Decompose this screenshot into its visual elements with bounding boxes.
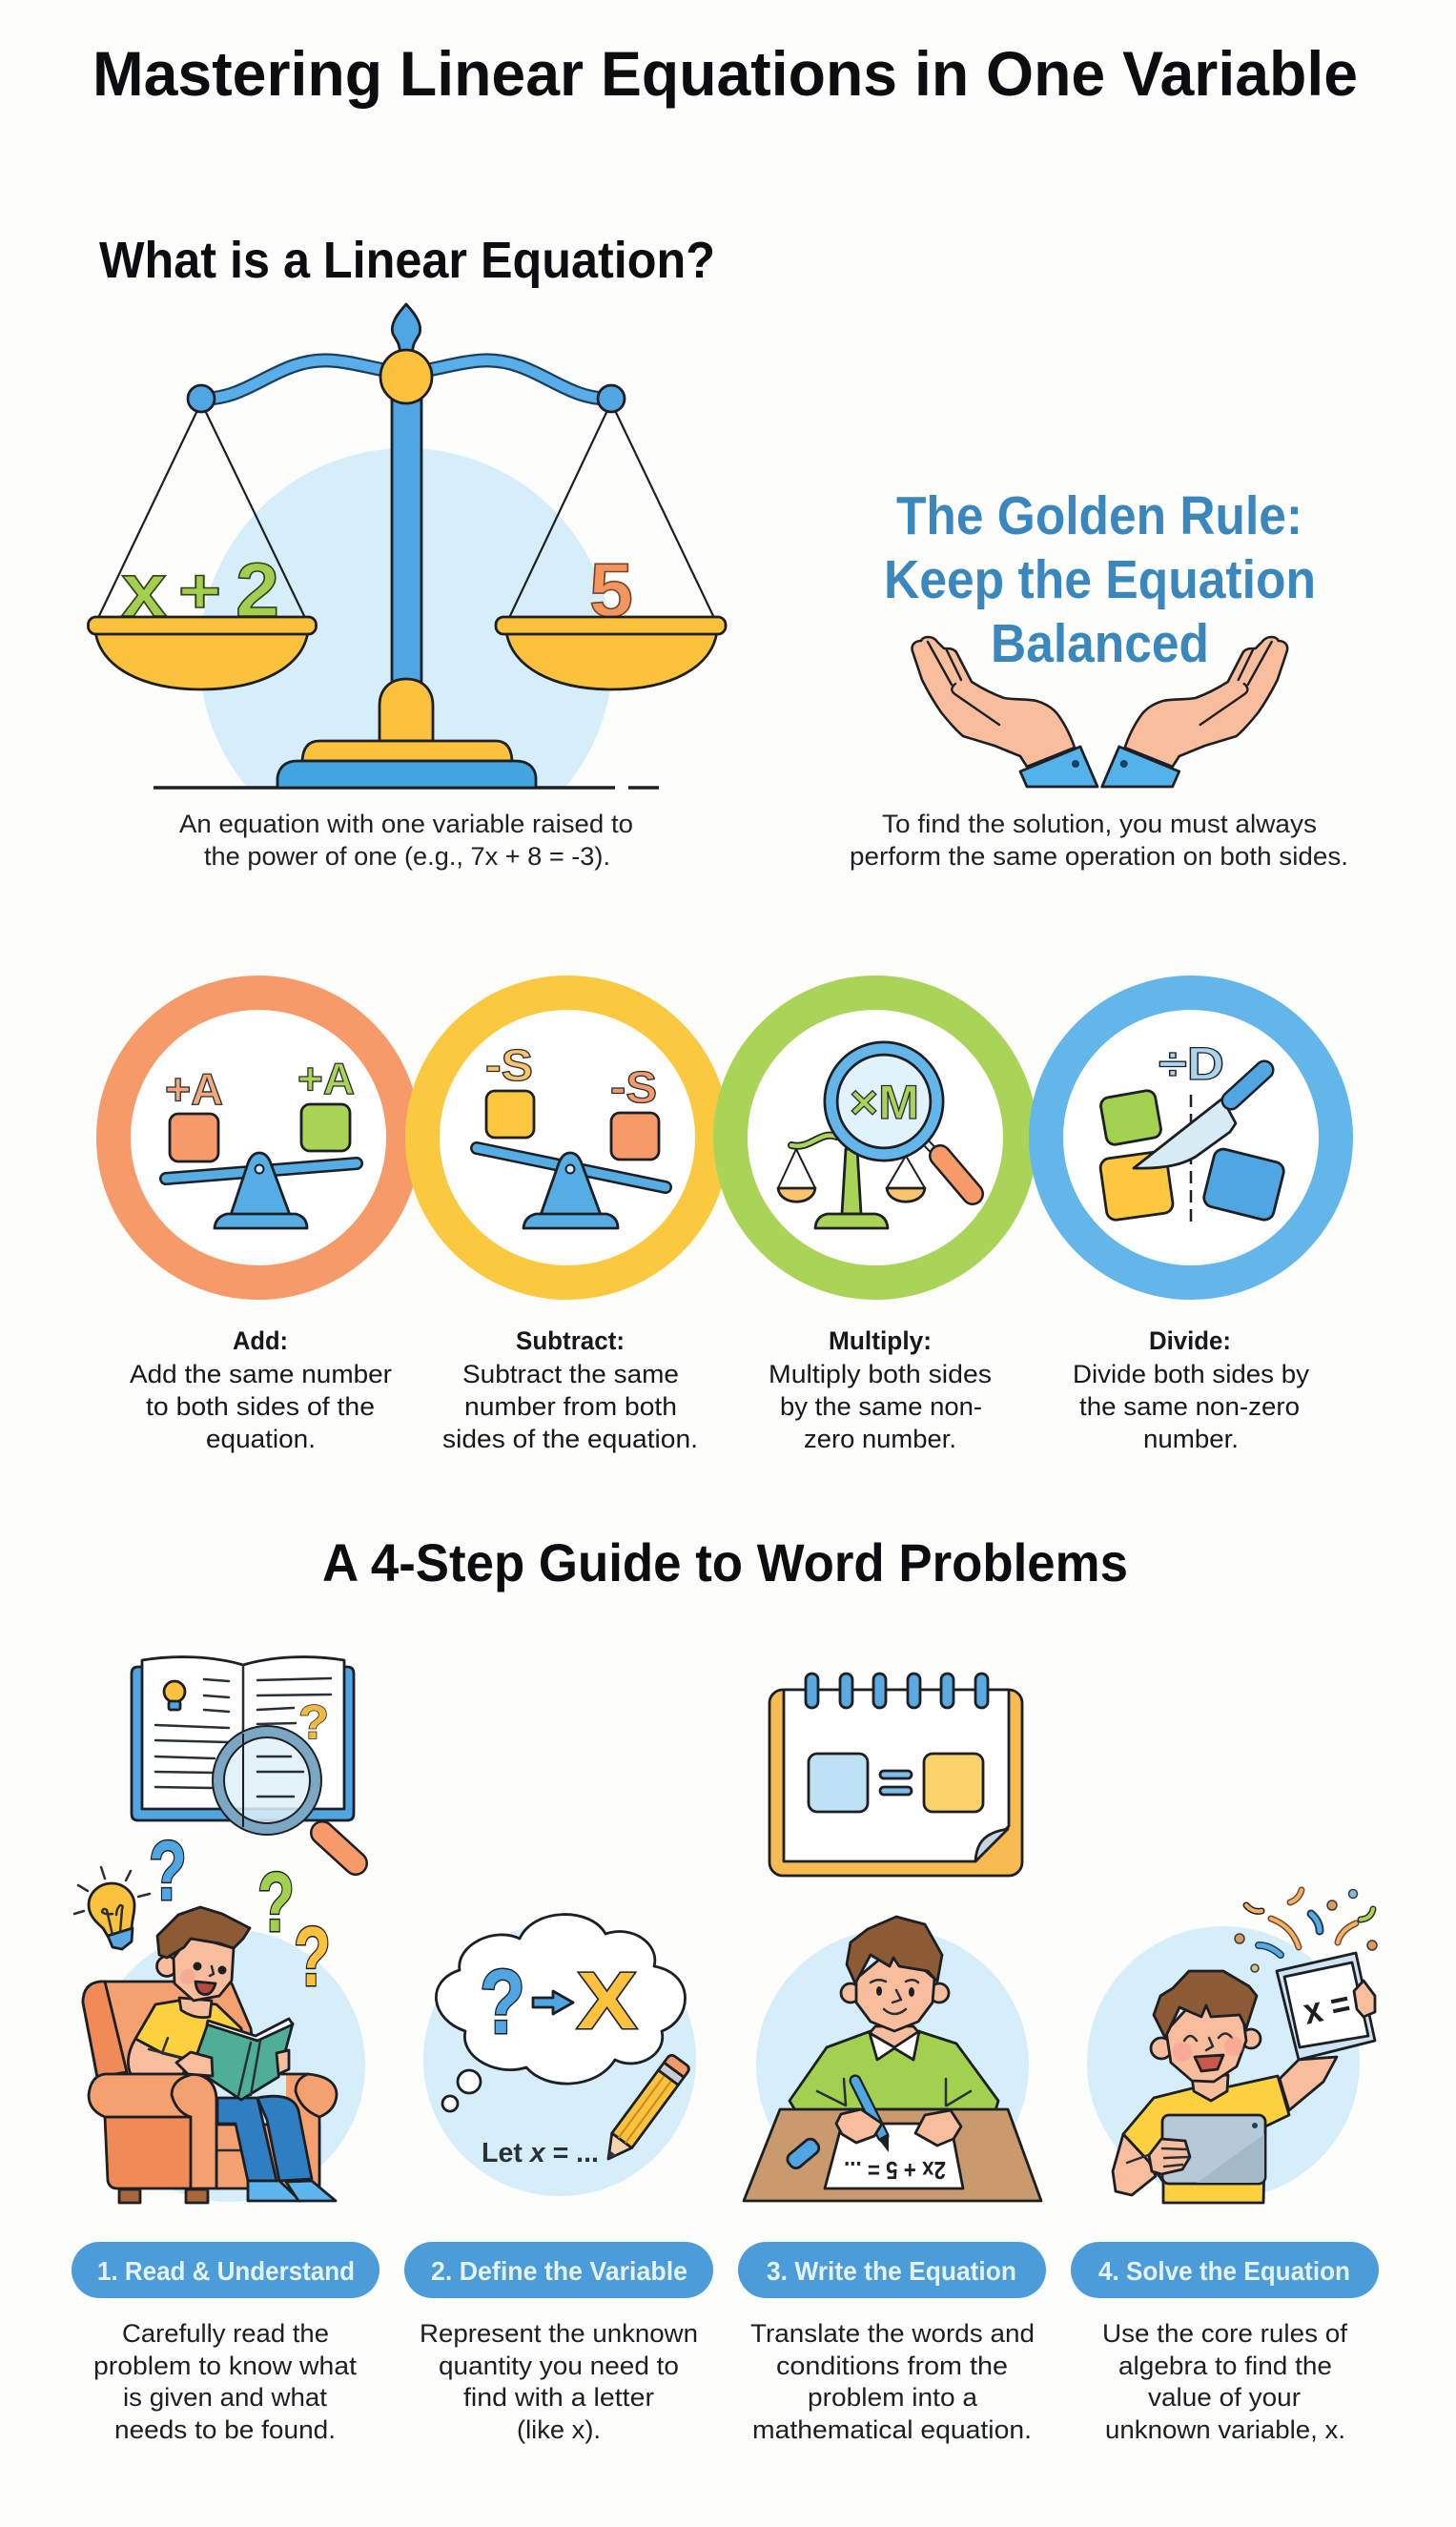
pen: [855, 2081, 883, 2136]
icon: light bulb and question marks: [74, 1823, 331, 2003]
text: divide: Divide:: [1149, 1326, 1231, 1355]
step 2 description: [420, 2319, 698, 2444]
text: multiply: zero number.: [804, 1425, 956, 1453]
raised arm: [1280, 2057, 1337, 2110]
step 3 label pill: 3. Write the Equation: [767, 2256, 1016, 2286]
shirt: [135, 2001, 250, 2079]
caption: golden rule: To find the solution, you must always: [882, 810, 1317, 838]
book: [197, 2024, 293, 2100]
seat behind legs: [216, 2125, 319, 2188]
head: [1151, 2038, 1172, 2059]
icon: light bulb and question marks: ?: [149, 1823, 187, 1918]
illustration: balance scale: [87, 303, 727, 790]
icon: open book with magnifier: [132, 1657, 356, 1863]
legs: [217, 2098, 277, 2181]
illustration: boy celebrating solution: [1087, 1890, 1377, 2203]
icon: blocks and knife: [1099, 1039, 1285, 1228]
caption: golden rule: [850, 810, 1348, 871]
raised tablet: [1277, 1953, 1375, 2060]
equation on left pan: 2: [236, 547, 279, 632]
step 4 description: Use the core rules of: [1102, 2319, 1348, 2348]
icon: notebook equation: [769, 1674, 1022, 1876]
step 4 label pill: 4. Solve the Equation: [1098, 2256, 1350, 2286]
desk: [744, 2109, 1041, 2201]
icon: seesaw subtract: -S: [610, 1062, 657, 1112]
question to x: ?: [480, 1951, 525, 2053]
step 1 description: is given and what: [123, 2383, 328, 2412]
step 1 description: problem to know what: [93, 2352, 358, 2380]
ring: green: [730, 993, 1020, 1283]
heading: golden rule: Keep the Equation: [884, 549, 1316, 610]
step 3 label pill: [738, 2242, 1046, 2298]
step 1 description: needs to be found.: [114, 2415, 336, 2444]
illustration: boy writing equation: [744, 1917, 1041, 2202]
panel: divide: [1046, 993, 1336, 1283]
number on right pan: 5: [589, 547, 633, 632]
text: multiply: [769, 1326, 992, 1453]
shirt: [1123, 2076, 1289, 2203]
chair back and wing: [83, 1982, 257, 2079]
step 3 description: Translate the words and: [750, 2319, 1035, 2348]
icon: seesaw add: +A: [165, 1064, 223, 1114]
icon: light bulb and question marks: ?: [294, 1909, 331, 2003]
step 4 description: [1102, 2319, 1348, 2444]
title: Mastering Linear Equations in One Variable: [92, 38, 1358, 109]
ring: yellow: [422, 993, 712, 1283]
illustration: boy reading in armchair: [83, 1907, 365, 2203]
head: [179, 1998, 212, 2018]
hands: [176, 2052, 213, 2076]
icon: open hands: [913, 637, 1287, 787]
icon: seesaw subtract: -S: [485, 1040, 533, 1090]
equation on left pan: x: [121, 547, 167, 632]
text: divide: [1073, 1326, 1310, 1453]
step 2 label pill: 2. Define the Variable: [431, 2256, 687, 2286]
paper: [825, 2124, 963, 2188]
step 2 label pill: [404, 2242, 713, 2298]
illustration: boy writing equation: 2x + 5 = ...: [844, 2156, 946, 2185]
step 4 description: unknown variable, x.: [1105, 2415, 1345, 2444]
icon: blocks and knife: ÷D: [1159, 1039, 1224, 1090]
pencil: [599, 2053, 690, 2167]
raised hand: [1354, 1981, 1375, 2017]
caption: golden rule: perform the same operation on both sides.: [850, 842, 1348, 871]
caption: definition: An equation with one variable raised to: [179, 810, 633, 838]
arm: [128, 2039, 189, 2074]
step 1 description: Carefully read the: [122, 2319, 329, 2348]
step 2 description: (like x).: [517, 2415, 601, 2444]
thought cloud: [436, 1915, 686, 2084]
heading: golden rule: The Golden Rule:: [896, 485, 1302, 546]
text: add: Add:: [233, 1326, 288, 1355]
text: subtract: number from both: [464, 1392, 677, 1421]
text: divide: the same non-zero: [1079, 1392, 1300, 1421]
icon: seesaw subtract: [477, 1040, 666, 1228]
icon: magnifier over small scale: [778, 1049, 973, 1228]
text: subtract: Subtract:: [516, 1326, 625, 1355]
neck: [1192, 2075, 1228, 2101]
equation on left pan: +: [178, 555, 221, 626]
hands: [836, 2109, 882, 2143]
let x text: Let x = ...: [482, 2138, 599, 2168]
text: add: equation.: [206, 1425, 316, 1453]
step 1 label pill: [72, 2242, 379, 2298]
raised tablet: x =: [1300, 1983, 1354, 2033]
shoes: [248, 2181, 300, 2201]
text: multiply: by the same non-: [780, 1392, 982, 1421]
heading: golden rule: [884, 485, 1316, 674]
icon: seesaw add: [165, 1054, 357, 1228]
caption: definition: [179, 810, 633, 871]
step 3 description: problem into a: [808, 2383, 978, 2412]
equation on left pan: [121, 547, 279, 632]
step 2 description: find with a letter: [463, 2383, 654, 2412]
text: subtract: sides of the equation.: [442, 1425, 698, 1453]
sweater: [790, 2031, 998, 2131]
step 4 label pill: [1071, 2242, 1379, 2298]
text: subtract: Subtract the same: [462, 1360, 679, 1388]
text: subtract: [442, 1326, 698, 1453]
left chair arm and front: [105, 2117, 191, 2188]
head: [841, 1983, 860, 2003]
eraser: [785, 2136, 822, 2170]
caption: definition: the power of one (e.g., 7x + 8 = -3).: [204, 842, 610, 871]
icon: light bulb and question marks: ?: [257, 1855, 295, 1949]
left arm and hand: [1113, 2134, 1156, 2195]
confetti: [1246, 1890, 1373, 1955]
text: multiply: Multiply:: [829, 1326, 932, 1355]
text: divide: number.: [1143, 1425, 1239, 1453]
illustration: define variable: [423, 1915, 696, 2196]
panel: subtract: [422, 993, 712, 1283]
panel: add: [113, 993, 403, 1283]
ring: orange: [113, 993, 403, 1283]
panel: multiply: [730, 993, 1020, 1283]
step 3 description: mathematical equation.: [752, 2415, 1032, 2444]
icon: seesaw add: +A: [297, 1054, 355, 1103]
step 2 description: Represent the unknown: [420, 2319, 698, 2348]
icon: magnifier over small scale: ×M: [850, 1076, 919, 1129]
illustration: define variable: X: [577, 1956, 637, 2045]
ring: blue: [1046, 993, 1336, 1283]
right chair arm: [274, 2074, 337, 2184]
icon: open book with magnifier: ?: [298, 1695, 329, 1749]
heading: what is a linear equation: What is a Linear Equation?: [99, 232, 715, 289]
step 1 description: [93, 2319, 358, 2444]
chair feet: [119, 2189, 208, 2203]
text: add: to both sides of the: [146, 1392, 375, 1421]
lower tablet: [1162, 2115, 1265, 2184]
text: add: [130, 1326, 392, 1453]
text: multiply: Multiply both sides: [769, 1360, 992, 1388]
step 3 description: [750, 2319, 1035, 2444]
heading: 4-step guide: A 4-Step Guide to Word Problems: [322, 1532, 1128, 1592]
step 2 description: quantity you need to: [439, 2352, 679, 2380]
text: divide: Divide both sides by: [1073, 1360, 1310, 1388]
heading: golden rule: Balanced: [991, 613, 1209, 674]
text: add: Add the same number: [130, 1360, 392, 1388]
step 3 description: conditions from the: [776, 2352, 1008, 2380]
collar and neck: [870, 2026, 919, 2048]
step 4 description: algebra to find the: [1118, 2352, 1332, 2380]
step 4 description: value of your: [1148, 2383, 1301, 2412]
step 1 label pill: 1. Read & Understand: [97, 2256, 355, 2286]
